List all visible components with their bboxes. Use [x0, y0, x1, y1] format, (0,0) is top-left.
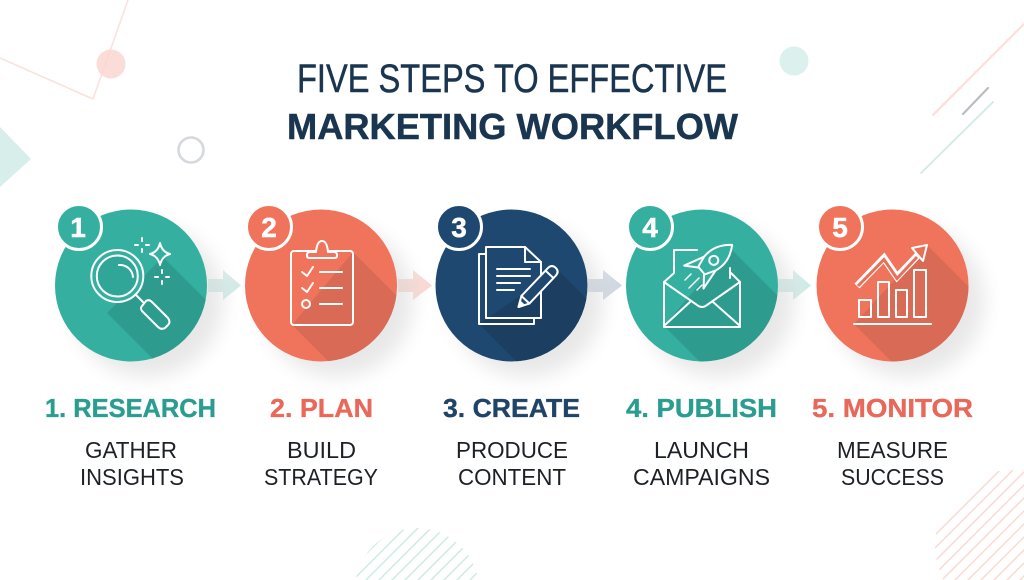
title	[287, 57, 738, 147]
badge 2: 2	[261, 212, 277, 243]
label: create: PRODUCE	[456, 437, 568, 463]
badge 4	[628, 204, 672, 250]
icon: clipboard checklist	[291, 241, 353, 325]
label: plan	[264, 393, 378, 490]
icon: bar chart with rising arrow	[854, 245, 931, 324]
badge 5	[818, 204, 862, 250]
label: create: 3. CREATE	[443, 393, 580, 423]
label: monitor: MEASURE	[837, 437, 948, 463]
badge 2	[246, 204, 292, 250]
title: FIVE STEPS TO EFFECTIVE	[297, 57, 727, 101]
badge 1: 1	[70, 212, 86, 243]
badge 1	[56, 204, 102, 250]
label: plan: STRATEGY	[264, 464, 378, 490]
icon: documents and pencil	[479, 247, 560, 324]
badge 3: 3	[451, 212, 467, 243]
label: monitor: 5. MONITOR	[812, 393, 973, 423]
label: publish: LAUNCH	[654, 437, 749, 463]
label: monitor	[812, 393, 973, 490]
step 5: monitor	[816, 206, 986, 380]
badge 3	[436, 204, 482, 250]
arrow: step 4 to 5	[778, 270, 811, 300]
icon: envelope with rocket	[664, 233, 742, 327]
arrow: step 2 to 3	[398, 270, 432, 300]
label: publish	[626, 393, 777, 490]
label: research	[45, 393, 216, 490]
arrow: step 1 to 2	[208, 270, 241, 300]
step 3: create	[436, 206, 606, 380]
label: publish: CAMPAIGNS	[633, 464, 770, 490]
label: create	[443, 393, 580, 490]
label: monitor: SUCCESS	[841, 464, 944, 490]
step 4: publish	[626, 206, 796, 380]
step 1: research	[55, 206, 226, 380]
badge 5: 5	[832, 212, 848, 243]
label: research: INSIGHTS	[80, 464, 184, 490]
icon: magnifier with sparkles	[91, 238, 170, 329]
label: research: GATHER	[85, 437, 177, 463]
label: create: CONTENT	[458, 464, 566, 490]
label: plan: 2. PLAN	[270, 393, 373, 423]
label: publish: 4. PUBLISH	[626, 393, 777, 423]
label: research: 1. RESEARCH	[45, 393, 216, 423]
arrow: step 3 to 4	[588, 270, 622, 300]
label: plan: BUILD	[287, 437, 356, 463]
step 2: plan	[245, 206, 416, 380]
badge 4: 4	[642, 212, 658, 243]
title: MARKETING WORKFLOW	[287, 106, 738, 147]
